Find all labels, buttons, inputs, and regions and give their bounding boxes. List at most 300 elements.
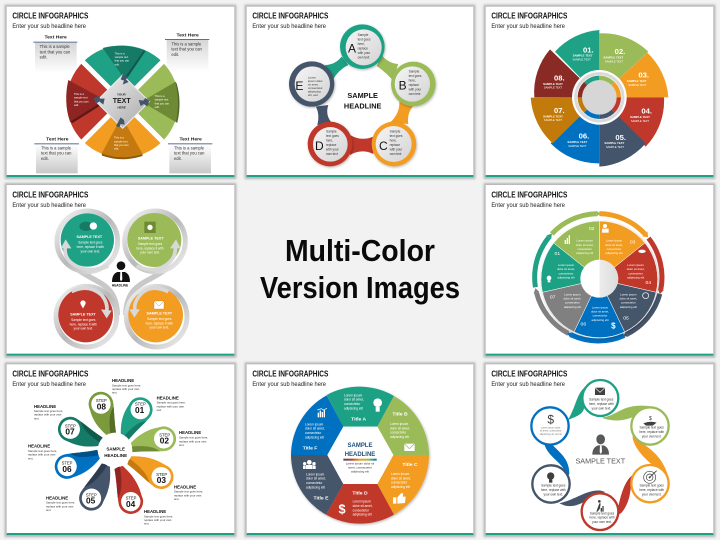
wedge numbers: 06 (581, 321, 586, 327)
wedge text: consectetur (607, 247, 621, 251)
center title line two: Version Images (260, 271, 460, 305)
circle: green (125, 211, 185, 272)
segment text: dolor sit amet, (306, 477, 326, 481)
wedge text: teal: edit. (115, 62, 120, 66)
circle A: replace (358, 46, 368, 50)
circle: orange: Sample text goes (147, 317, 172, 321)
step labels: 07 (65, 427, 75, 437)
wedge labels: SAMPLE TEXT (603, 55, 623, 59)
segment text: adipiscing elit (305, 435, 324, 439)
segment text: consectetur (390, 431, 406, 435)
callout: top left: edit. (40, 55, 48, 60)
wedge text: orange: sample text (114, 139, 128, 143)
ring: orange: your own text. (642, 492, 662, 496)
center hexagon (327, 427, 393, 484)
wedge labels: 06. (579, 132, 589, 141)
title: CIRCLE INFOGRAPHICS (12, 370, 89, 379)
wedge text: Lorem ipsum (558, 263, 575, 267)
step descriptions: Sample text goes here, (174, 490, 203, 494)
icon: person with headline (112, 261, 130, 288)
petal 01 (112, 394, 156, 444)
center hub: HEADLINE (104, 453, 127, 458)
segment text: dolor sit amet, (344, 398, 364, 402)
circle B: text goes (409, 74, 422, 78)
wedge text: dolor sit amet, (591, 309, 609, 313)
panel 5: seven wedge circle with arrows (484, 183, 715, 358)
segment text: consectetur (344, 402, 360, 406)
wedge labels: SAMPLE TEXT (606, 145, 624, 149)
wedge text: adipiscing elit (620, 305, 637, 309)
segment titles: Title F (303, 446, 317, 452)
wedge icons (547, 224, 649, 330)
subtitle: Enter your sub headline here (252, 381, 326, 388)
wedge text: Lorem ipsum (564, 292, 581, 296)
callout: bottom right: edit. (174, 156, 182, 161)
step descriptions: HEADLINE (34, 404, 56, 409)
center ring and disc (572, 70, 627, 125)
circle: red: Sample text goes (71, 318, 96, 322)
callout: top right (165, 32, 209, 72)
callout: bottom right: This is a sample (174, 145, 205, 150)
ring: blue (531, 407, 569, 445)
wedge text: adipiscing elit (564, 305, 581, 309)
wedge labels (543, 45, 652, 149)
step labels (62, 398, 170, 509)
wedge labels: SAMPLE TEXT (568, 144, 587, 148)
wedge labels: SAMPLE TEXT (543, 82, 563, 86)
wedge icons: $ (611, 321, 616, 330)
wedge text: dolor sit amet, (563, 296, 581, 300)
wedge labels: SAMPLE TEXT (627, 79, 647, 83)
circle B: replace (409, 83, 419, 87)
outer arrows (534, 211, 664, 341)
wedge labels: SAMPLE TEXT (631, 119, 649, 123)
wedge text: orange: This is a (114, 136, 124, 140)
ring: navy: Sample text goes (541, 484, 566, 488)
callout: top right: This is a sample (171, 41, 202, 46)
icon: lightbulb (373, 398, 382, 412)
step labels: 02 (160, 436, 169, 446)
circle C (372, 122, 416, 166)
ring: red: here, replace with (590, 516, 615, 520)
step descriptions: replace with your own (46, 504, 74, 508)
wedge text: Lorem ipsum (627, 263, 644, 267)
circle D: D (315, 139, 324, 153)
step descriptions: replace with your own (144, 518, 172, 522)
circle: red (56, 286, 117, 347)
segment titles: Title B (392, 412, 408, 418)
circle A: A (348, 42, 356, 56)
petal 06 (53, 444, 104, 482)
wedge text: dolor sit amet, (605, 243, 623, 247)
icon: chart (317, 408, 327, 417)
ring: teal (582, 380, 618, 416)
title: CIRCLE INFOGRAPHICS (12, 191, 89, 200)
center text: SAMPLE TEXT (575, 457, 625, 466)
panel 2: five linked circles (245, 5, 475, 179)
circle B: Sample (409, 69, 420, 73)
circle E: sit amet, (308, 83, 319, 87)
callout: bottom left: Text Here (46, 136, 69, 142)
step descriptions: replace with your own (28, 453, 56, 457)
step labels: 04 (126, 499, 136, 509)
wedge text: consectetur (593, 314, 607, 318)
icon: envelope (404, 444, 415, 451)
wedge labels: 03. (638, 71, 649, 80)
wedge labels: SAMPLE TEXT (628, 83, 647, 87)
circle E: elit, sed (308, 93, 318, 97)
center hexagon: SAMPLE (348, 443, 372, 449)
segment text: dolor sit amet, (390, 426, 410, 430)
circle E: adipiscing (308, 90, 321, 94)
circle D: with your (326, 148, 339, 152)
wedge text: green: This is a (155, 94, 165, 98)
wedge text: green: sample text (155, 98, 169, 102)
center diamond: TEXT (113, 98, 131, 105)
icon: person with headline: HEADLINE (112, 284, 128, 288)
center hexagon: Lorem ipsum dolor sit (346, 462, 374, 466)
step descriptions: text. (157, 408, 162, 412)
step labels: STEP (62, 461, 73, 466)
wedge text: orange: that you can (114, 143, 129, 147)
wedge text: consectetur (577, 247, 592, 251)
step labels: 05 (86, 496, 96, 506)
wedge labels: SAMPLE TEXT (630, 115, 650, 119)
segment text: dolor sit amet, (391, 476, 411, 480)
callout: bottom right: Text Here (179, 136, 202, 142)
step descriptions: Sample text goes here, (157, 401, 186, 405)
callout: top right: Text Here (176, 32, 199, 38)
step descriptions: text. (144, 522, 150, 526)
segment text: Lorem ipsum (353, 500, 371, 504)
step labels: 06 (62, 464, 72, 474)
subtitle: Enter your sub headline here (491, 381, 565, 388)
title: CIRCLE INFOGRAPHICS (252, 12, 329, 21)
title: CIRCLE INFOGRAPHICS (12, 12, 89, 21)
segment text: adipiscing elit (390, 435, 409, 439)
panel 6: eight step petals (5, 362, 236, 537)
wedge numbers: 02 (589, 226, 595, 232)
wedge text: teal: This is a (115, 51, 125, 55)
circle: green: here, replace it with (136, 246, 164, 250)
step descriptions: HEADLINE (28, 444, 50, 449)
title: CIRCLE INFOGRAPHICS (491, 370, 568, 379)
segment text: dolor sit amet, (305, 427, 325, 431)
circle C: Sample (390, 130, 401, 134)
subtitle: Enter your sub headline here (12, 381, 86, 388)
icon: dollar: $ (338, 502, 346, 516)
step labels: 03 (157, 475, 166, 485)
circle: orange (126, 286, 187, 347)
circle: teal: your own text. (81, 249, 100, 253)
callout: bottom right: text that you can (174, 151, 205, 156)
step descriptions: HEADLINE (157, 396, 179, 401)
circle E (289, 61, 334, 107)
panel 3: eight wedge circle (484, 5, 715, 179)
circle A: text goes (358, 37, 371, 41)
center hexagon: amet, consectetur (348, 466, 372, 470)
circle B: with your (409, 87, 421, 91)
ring: navy: here, replace with (541, 488, 566, 492)
segment titles: Title A (351, 416, 367, 422)
circle A: with your (358, 51, 370, 55)
segment titles: Title D (352, 491, 368, 497)
silver S curves (75, 267, 168, 315)
circle E: consectetur (308, 86, 323, 90)
wedge text: red: that you can (74, 99, 89, 103)
ring: teal: Sample text goes (589, 398, 614, 402)
circle: red: SAMPLE TEXT (70, 312, 97, 316)
wedge text: dolor sit amet, (576, 243, 594, 247)
icon: thumbs up (393, 493, 406, 504)
circle D: text goes (326, 134, 339, 138)
circle: teal (57, 211, 118, 272)
panel 4: silver ring circles (5, 183, 236, 358)
wedge numbers: 03 (630, 240, 636, 246)
callout: top left: Text Here (44, 35, 67, 41)
wedge text: adipiscing elit (576, 251, 593, 255)
circle: teal: SAMPLE TEXT (77, 235, 103, 239)
step descriptions: replace with your own (112, 387, 140, 391)
wedge labels: 05. (615, 133, 626, 142)
petal 08 (86, 390, 122, 439)
wedge labels: SAMPLE TEXT (544, 118, 562, 122)
callout: top left: text that you can (40, 49, 71, 54)
wedge labels: SAMPLE TEXT (544, 86, 562, 90)
panel 7: six segment ring with hexagon (245, 362, 475, 537)
ring: blue: $ (547, 413, 554, 427)
wedges (541, 221, 658, 338)
center headline: SAMPLE (347, 91, 378, 100)
subtitle: Enter your sub headline here (252, 23, 326, 30)
wedge numbers (550, 226, 651, 327)
segment text: adipiscing elit (391, 485, 410, 489)
step labels: STEP (96, 398, 107, 403)
ring: blue: Lorem ipsum dolor (541, 426, 561, 429)
wedge labels: 04. (641, 107, 652, 116)
step descriptions: text. (34, 416, 40, 420)
subtitle: Enter your sub headline here (491, 23, 565, 30)
step labels: 01 (135, 405, 145, 415)
circle: green: your own text. (140, 251, 160, 255)
center hexagon: HEADLINE (345, 452, 375, 458)
ring: orange (631, 465, 669, 502)
wedge text: Lorem ipsum (592, 305, 609, 309)
circle: orange: your own text. (150, 326, 169, 330)
step descriptions: text. (46, 508, 52, 512)
segment text: dolor sit amet, (353, 504, 373, 508)
step labels: STEP (126, 495, 137, 500)
circle C: own text (390, 152, 402, 156)
circle D: replace (326, 143, 337, 147)
center diamond: HERE (118, 106, 126, 110)
ring: green: Sample text goes (639, 426, 664, 430)
callout: bottom left: This is a sample (41, 145, 72, 150)
callout: bottom left (34, 136, 79, 173)
segment text: Lorem ipsum (305, 422, 324, 426)
circle C: with your (390, 148, 402, 152)
center title: Multi-Color (285, 234, 435, 268)
wedge labels: SAMPLE TEXT (567, 140, 587, 144)
circle A: Sample (358, 33, 369, 37)
step descriptions: Sample text goes here, (28, 449, 57, 453)
circle: orange: here, replace it with (146, 321, 173, 325)
wedge labels: 01. (583, 45, 594, 54)
wedge labels: SAMPLE TEXT (543, 114, 563, 118)
wedge text: adipiscing elit (627, 275, 644, 279)
segment text: adipiscing elit (353, 513, 372, 517)
center hexagon: adipiscing elit (351, 470, 369, 474)
segment text: Lorem ipsum (306, 472, 325, 476)
ring: red: Sample text goes (590, 511, 615, 515)
step descriptions: Sample text goes here, (144, 514, 173, 518)
wedges (531, 30, 668, 167)
circle D: here, (326, 139, 333, 143)
wedge text: dolor sit amet, (557, 267, 575, 271)
ring: orange: Sample text goes (639, 484, 664, 488)
wedge text: Lorem ipsum (606, 239, 623, 243)
center hub (98, 433, 132, 467)
wedge labels: SAMPLE TEXT (604, 141, 624, 145)
wedge text: orange: edit. (114, 147, 119, 151)
circle B: own text (409, 92, 421, 96)
wedge labels: SAMPLE TEXT (573, 54, 593, 58)
wedge text: red: edit. (74, 103, 79, 107)
ring: blue: sit amet, consectetur (540, 430, 562, 433)
wedge text: red: sample text (74, 96, 88, 100)
petal 05 (76, 460, 119, 513)
ring: navy: your own text. (544, 492, 563, 496)
step descriptions: Sample text goes here, (179, 436, 208, 440)
wedge numbers: 07 (550, 295, 556, 301)
callout: top left: This is a sample (40, 44, 70, 49)
connectors (316, 55, 413, 155)
step descriptions: replace with your own (179, 439, 207, 443)
circle: teal: here, replace it with (77, 245, 104, 249)
step descriptions: Sample text goes here, (46, 501, 75, 505)
title: CIRCLE INFOGRAPHICS (491, 191, 568, 200)
segment titles: Title E (314, 496, 329, 502)
step descriptions: HEADLINE (174, 484, 196, 489)
wedge labels: 02. (615, 47, 625, 56)
ring: teal: here, replace with (589, 402, 614, 406)
wedge labels: 08. (554, 74, 565, 83)
panel 8: six rings with swooshes (484, 362, 715, 537)
segment text: consectetur (305, 431, 321, 435)
circle C: C (379, 139, 388, 153)
segment text (305, 393, 411, 517)
circle: green: Sample text goes (138, 242, 163, 246)
wedge labels: SAMPLE TEXT (573, 58, 591, 62)
circle: green: SAMPLE TEXT (138, 236, 164, 240)
step descriptions: HEADLINE (46, 495, 68, 500)
callout: bottom left: edit. (41, 156, 49, 161)
ring: orange: here, replace with (639, 488, 664, 492)
ring: navy (532, 465, 570, 503)
ring segments (291, 387, 429, 524)
subtitle: Enter your sub headline here (12, 23, 86, 30)
circle D (308, 122, 352, 166)
title: CIRCLE INFOGRAPHICS (252, 370, 329, 379)
step labels: STEP (65, 423, 76, 428)
wedge text: adipiscing elit (592, 318, 609, 322)
center hub: SAMPLE (106, 446, 125, 451)
step descriptions: text. (112, 391, 118, 395)
ring: green: $ (649, 416, 652, 422)
circle A: own text (358, 55, 370, 59)
segment text: Lorem ipsum (390, 422, 409, 426)
segment titles (303, 412, 418, 502)
icon: people (303, 460, 316, 469)
circle B: B (399, 78, 407, 92)
step labels: STEP (159, 432, 170, 437)
petal 04 (108, 462, 146, 516)
step descriptions: replace with your own (34, 413, 62, 417)
wedge text: consectetur (565, 301, 580, 305)
petal 02 (127, 424, 177, 458)
ring: green: your own text. (642, 434, 662, 438)
circle C: text goes (390, 134, 403, 138)
circle A (340, 24, 385, 69)
wedge text: green: edit. (155, 105, 160, 109)
wedge text: Lorem ipsum (620, 292, 637, 296)
wedge text: teal: sample text (115, 55, 129, 59)
ring: red (582, 493, 618, 530)
circle C: here, (390, 139, 397, 143)
step labels: 08 (97, 401, 106, 411)
segment text: consectetur (353, 508, 369, 512)
segment text: adipiscing elit (344, 406, 363, 410)
wedge text (557, 239, 645, 322)
step labels: STEP (156, 472, 167, 477)
callout: top right: text that you can (171, 47, 203, 52)
callout: bottom left: text that you can (41, 151, 72, 156)
title: CIRCLE INFOGRAPHICS (491, 12, 568, 21)
wedge text: dolor sit amet, (619, 296, 637, 300)
step descriptions: text. (174, 497, 180, 501)
step descriptions: HEADLINE (144, 509, 166, 514)
callout: top left (33, 35, 77, 73)
segment text: consectetur (306, 481, 322, 485)
petal 07 (55, 414, 106, 455)
circle: red: your own text. (74, 327, 93, 331)
segment text: adipiscing elit (306, 485, 325, 489)
subtitle: Enter your sub headline here (491, 202, 565, 209)
center headline: HEADLINE (344, 101, 381, 110)
step descriptions: HEADLINE (179, 430, 201, 435)
step descriptions (28, 378, 208, 526)
step descriptions: Sample text goes here, (34, 409, 63, 413)
petal 03 (123, 448, 177, 493)
circle E: Lorem (308, 76, 317, 80)
circle B (391, 62, 436, 106)
segment text: Lorem ipsum (344, 393, 363, 397)
wedge text: dolor sit amet, (627, 267, 645, 271)
step descriptions: text. (179, 443, 185, 447)
segment titles: Title C (402, 462, 418, 468)
ring: blue: adipiscing elit, sed do (540, 433, 562, 436)
swooshes (544, 387, 668, 516)
wedge text: consectetur (621, 301, 636, 305)
wedge numbers: 05 (623, 316, 629, 322)
wedge labels: 07. (554, 106, 565, 115)
wedge text: adipiscing elit (558, 275, 575, 279)
wedge text: teal: that you can (115, 59, 130, 63)
callout: top right: edit. (171, 52, 179, 57)
center diamond: YOUR (117, 92, 126, 96)
circle E: ipsum dolor (308, 79, 323, 83)
circle D: Sample (326, 130, 337, 134)
